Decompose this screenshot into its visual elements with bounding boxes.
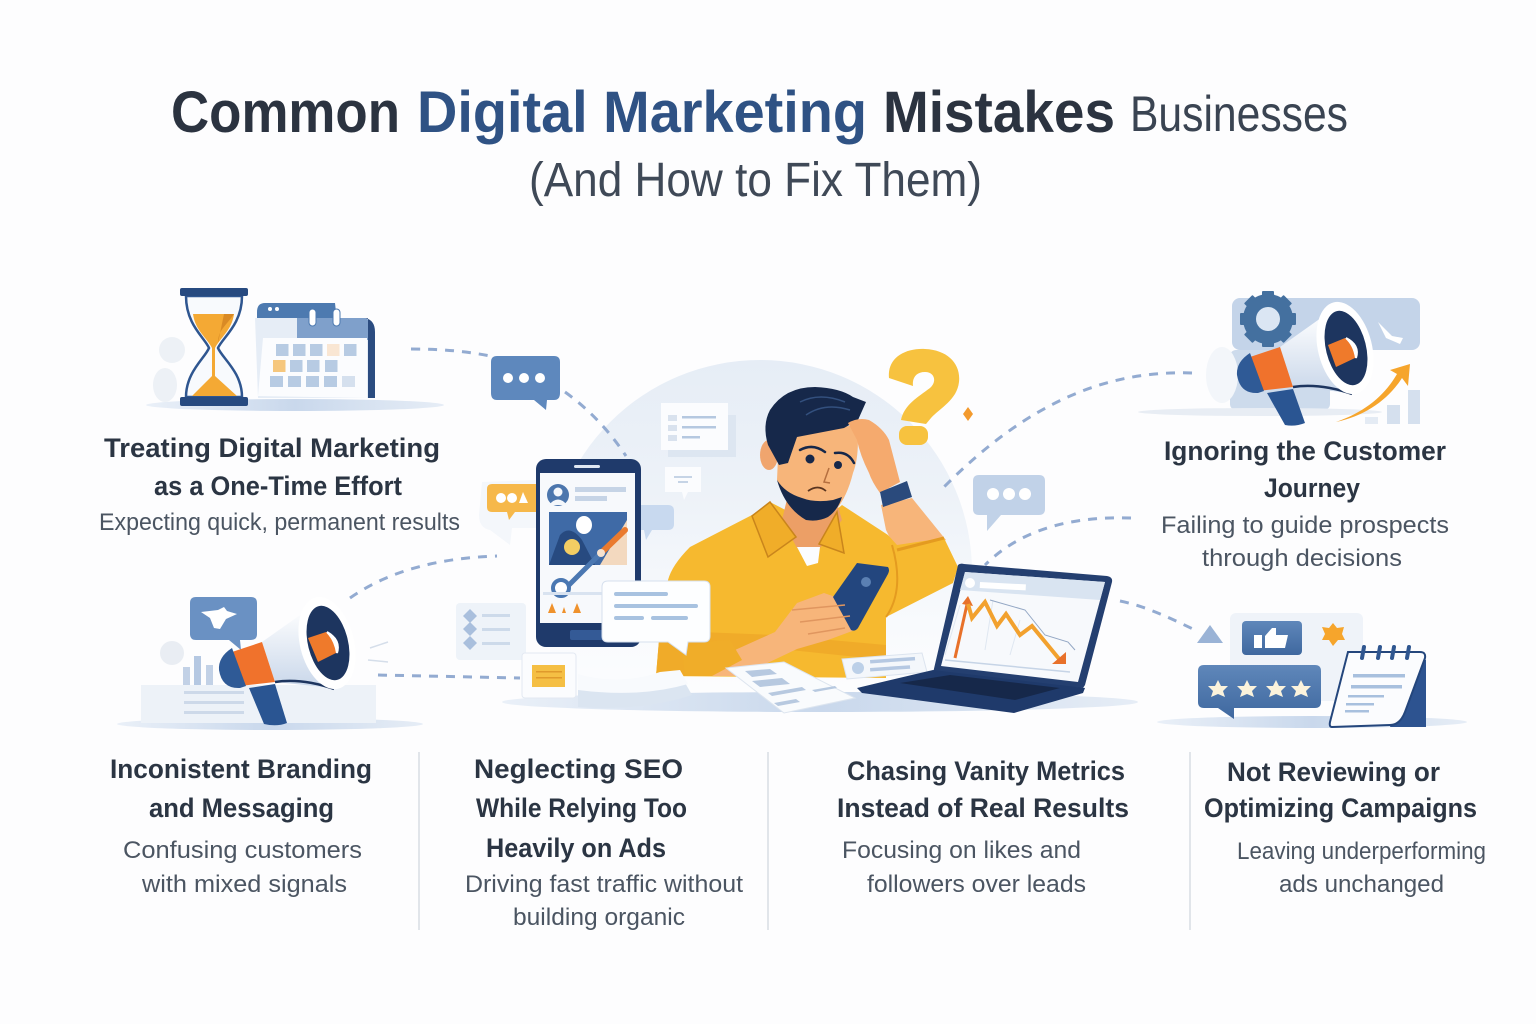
icon: hourglass and calendar — [146, 288, 444, 411]
smartphone — [536, 459, 641, 647]
text block: not reviewing campaigns: Optimizing Campaigns — [1204, 793, 1477, 823]
title: Mistakes — [883, 80, 1115, 145]
calendar — [255, 303, 375, 398]
title: Digital Marketing — [417, 80, 867, 145]
text block: chasing vanity metrics: Focusing on likes and — [842, 837, 1081, 864]
text block: chasing vanity metrics — [837, 756, 1129, 898]
laptop — [857, 564, 1112, 713]
title: Common — [171, 80, 400, 145]
speech bubble: behind phone — [640, 505, 674, 540]
text block: not reviewing campaigns: Not Reviewing or — [1227, 757, 1440, 787]
speech card: pale list — [661, 403, 736, 457]
text block: neglecting seo: While Relying Too — [476, 793, 687, 823]
undershirt — [797, 547, 820, 566]
text block: treating digital marketing: Expecting quick, permanent results — [99, 509, 460, 536]
text block: ignoring the customer journey: Journey — [1264, 473, 1360, 503]
speech card: small — [665, 467, 701, 500]
text block: neglecting seo: Neglecting SEO — [474, 754, 683, 784]
megaphone — [1237, 296, 1383, 426]
raised forearm — [881, 498, 946, 552]
text block: neglecting seo: building organic — [513, 904, 685, 931]
hair — [765, 387, 866, 465]
text block: treating digital marketing: as a One-Time Effort — [154, 471, 402, 501]
text block: neglecting seo — [465, 754, 743, 931]
text block: inconsistent branding: Confusing customers — [123, 837, 362, 864]
chat bubble — [190, 597, 257, 650]
sparkle — [963, 407, 973, 421]
text block: treating digital marketing: Treating Digital Marketing — [104, 433, 440, 463]
lower arm and hand — [699, 593, 864, 676]
title — [171, 80, 1348, 145]
text block: chasing vanity metrics: Chasing Vanity Metrics — [847, 756, 1125, 786]
loose report paper — [726, 662, 855, 713]
text block: ignoring the customer journey: Failing to guide prospects — [1161, 512, 1449, 539]
arrow — [1336, 364, 1410, 422]
icon: gear, megaphone and growth arrow — [1138, 291, 1420, 426]
speech bubble: blue — [491, 356, 560, 410]
floating text card — [602, 581, 710, 655]
text block: chasing vanity metrics: followers over leads — [867, 871, 1086, 898]
text block: ignoring the customer journey: Ignoring the Customer — [1164, 436, 1446, 466]
image with wrench — [549, 512, 627, 596]
avatar — [547, 484, 569, 506]
text block: inconsistent branding: Inconistent Branding — [110, 754, 372, 784]
bars — [1365, 417, 1378, 424]
text block: ignoring the customer journey: through decisions — [1202, 545, 1402, 572]
neck — [782, 495, 842, 548]
question mark — [889, 349, 959, 445]
rating bubble — [1198, 665, 1321, 719]
face — [777, 425, 858, 518]
dashed connector lines — [350, 349, 1195, 678]
text block: not reviewing campaigns — [1204, 757, 1486, 898]
text block: chasing vanity metrics: Instead of Real Results — [837, 793, 1129, 823]
watch — [880, 481, 912, 507]
laptop base — [857, 670, 1085, 713]
collar — [752, 502, 844, 557]
small profile card — [842, 653, 927, 679]
ear — [760, 440, 778, 470]
megaphone — [219, 591, 365, 725]
line chart — [945, 596, 1075, 672]
speech bubble: orange — [479, 480, 536, 545]
hourglass — [180, 288, 248, 406]
text block: inconsistent branding — [110, 754, 372, 898]
man — [656, 387, 958, 678]
text block: inconsistent branding: with mixed signals — [141, 871, 347, 898]
text block: not reviewing campaigns: ads unchanged — [1279, 871, 1444, 898]
title: Businesses — [1130, 86, 1348, 142]
text block: neglecting seo: Heavily on Ads — [486, 833, 666, 863]
paper stack — [578, 670, 692, 708]
text block: inconsistent branding: and Messaging — [149, 793, 334, 823]
central ground shadow — [502, 692, 1138, 712]
text block: not reviewing campaigns: Leaving underperforming — [1237, 838, 1486, 865]
eyes and brows — [800, 447, 854, 491]
notepad — [1330, 647, 1426, 727]
icon: megaphone with chat bubble — [117, 591, 423, 730]
gear — [1240, 291, 1296, 347]
icon: reviews, thumbs up and notepad — [1157, 613, 1467, 728]
central backdrop circle — [548, 360, 972, 690]
text block: treating digital marketing — [99, 433, 460, 536]
speech bubble: light blue — [973, 475, 1045, 531]
thumbs up tile — [1242, 621, 1302, 655]
beard — [777, 480, 842, 521]
held phone — [833, 563, 889, 631]
dividers — [419, 752, 1190, 930]
text block: ignoring the customer journey — [1161, 436, 1449, 572]
hand on head — [848, 419, 900, 493]
text block: neglecting seo: Driving fast traffic without — [465, 871, 743, 898]
subtitle: (And How to Fix Them) — [529, 154, 982, 207]
list card — [456, 603, 526, 660]
shirt — [656, 502, 958, 678]
star badge — [1322, 623, 1345, 646]
sticky note card — [522, 653, 576, 698]
